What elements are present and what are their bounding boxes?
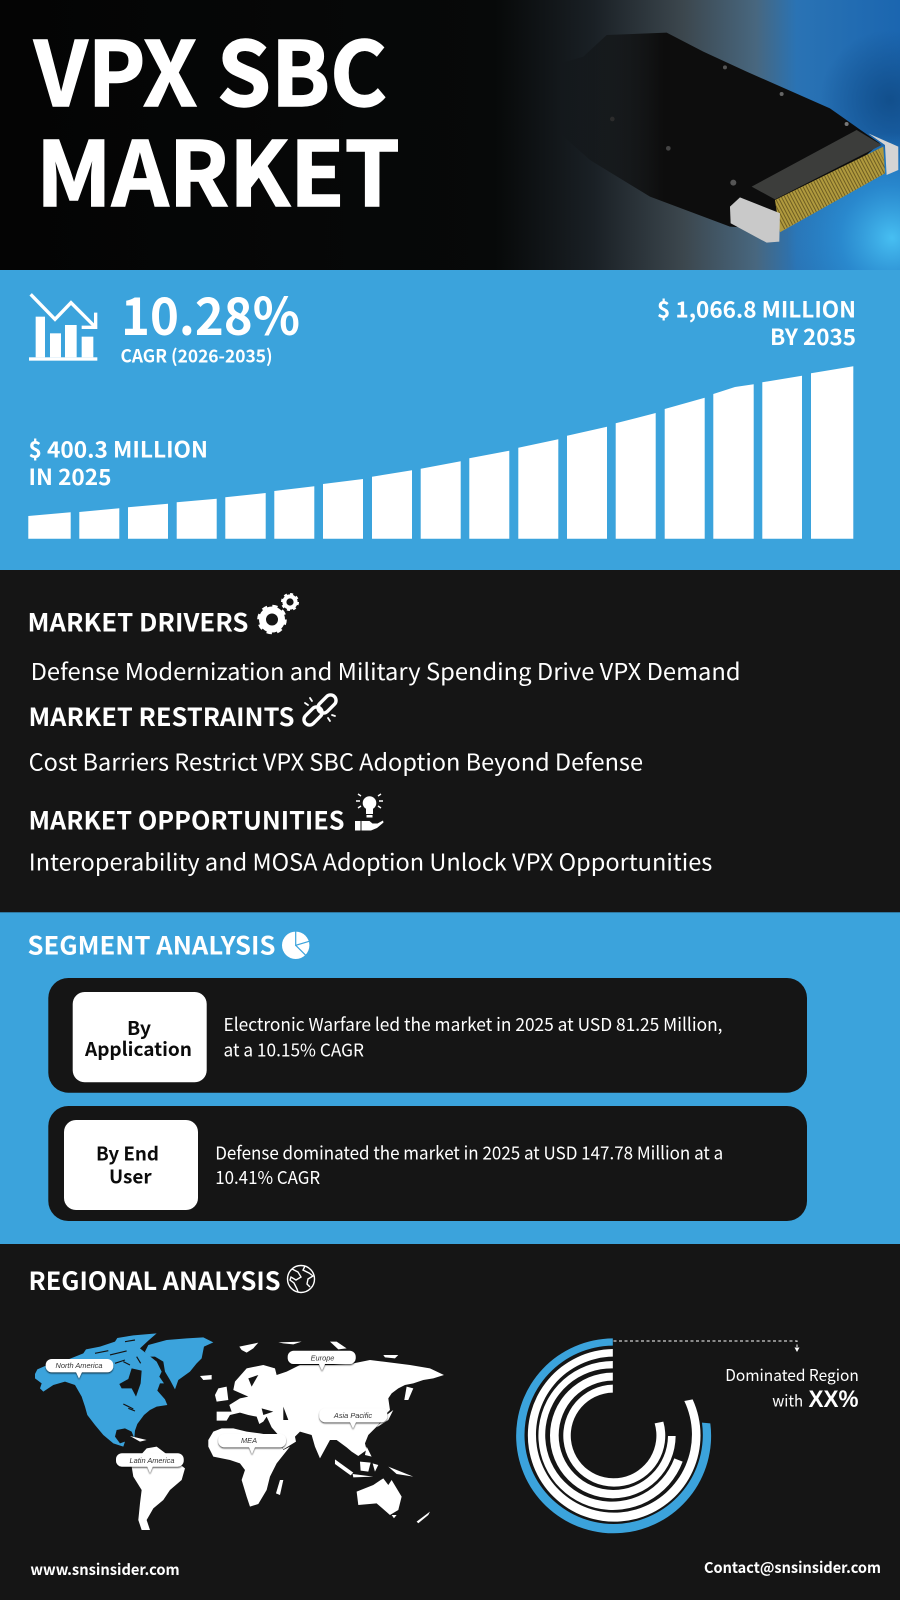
heading: regional analysis: REGIONAL ANALYSIS — [28, 1262, 280, 1298]
callout: Latin America: Latin America — [130, 1456, 174, 1465]
heading: market drivers: MARKET DRIVERS — [28, 604, 248, 640]
text: by end user — [215, 1139, 723, 1190]
label: by end user — [64, 1120, 198, 1210]
card: by application — [48, 978, 807, 1093]
heading: market restraints: MARKET RESTRAINTS — [28, 698, 294, 734]
opportunity text: Interoperability and MOSA Adoption Unlock VPX Opportunities — [29, 844, 712, 878]
dashed leader arrow — [614, 1341, 800, 1352]
2025 value — [28, 432, 208, 492]
icon: lightbulb in hand — [355, 794, 384, 830]
driver text: Defense Modernization and Military Spending Drive VPX Demand — [31, 653, 741, 687]
icon: chart with arrow — [29, 294, 97, 361]
text: by application: Electronic Warfare led the market in 2025 at USD 81.25 Million, — [224, 1011, 722, 1037]
CAGR label: CAGR (2026-2035) — [120, 342, 272, 368]
icon: gears — [259, 594, 298, 632]
text: by application: at a 10.15% CAGR — [224, 1036, 364, 1062]
other continents — [130, 1342, 444, 1530]
title — [33, 3, 400, 232]
2025 value: IN 2025 — [28, 460, 112, 492]
label: by application: Application — [84, 1035, 192, 1062]
callout: Latin America — [116, 1453, 184, 1473]
North America and Greenland — [35, 1333, 213, 1447]
icon: pie chart — [282, 931, 309, 959]
label: by application: By — [127, 1014, 151, 1041]
text: by application — [224, 1011, 722, 1062]
panel: header — [0, 0, 900, 270]
CAGR value: 10.28% — [121, 275, 300, 350]
callout: Asia Pacific — [319, 1408, 387, 1428]
icon: broken link — [302, 693, 338, 727]
callout: Europe — [288, 1351, 356, 1370]
2035 value — [657, 292, 856, 352]
panel: segment analysis — [0, 912, 900, 1244]
label: by application — [73, 992, 207, 1082]
callout: North America — [46, 1359, 113, 1378]
callout: MEA: MEA — [241, 1436, 257, 1445]
illustration: VPX single board computer — [560, 33, 898, 243]
title: MARKET — [36, 103, 400, 232]
restraint text: Cost Barriers Restrict VPX SBC Adoption Beyond Defense — [29, 744, 643, 778]
text: by end user: 10.41% CAGR — [215, 1164, 320, 1190]
label: by end user: By End — [96, 1140, 159, 1167]
dominated region text: Dominated Region — [725, 1362, 859, 1386]
dominated region text: with — [772, 1388, 803, 1412]
world map — [35, 1333, 444, 1530]
callout: Asia Pacific: Asia Pacific — [333, 1411, 372, 1420]
title: VPX SBC — [33, 3, 387, 132]
panel: market dynamics — [0, 570, 900, 912]
callout: North America: North America — [56, 1361, 102, 1370]
card: by end user — [48, 1106, 807, 1221]
footer: website: www.snsinsider.com — [30, 1559, 180, 1580]
label: by end user: User — [109, 1162, 152, 1189]
heading: segment analysis: SEGMENT ANALYSIS — [28, 926, 276, 962]
heading: market opportunities: MARKET OPPORTUNITIES — [28, 801, 344, 837]
text: by end user: Defense dominated the market in 2025 at USD 147.78 Million at a — [215, 1139, 723, 1165]
icon: globe — [288, 1266, 314, 1292]
2035 value: BY 2035 — [770, 320, 856, 352]
panel: regional analysis — [0, 1244, 900, 1600]
2035 value: $ 1,066.8 MILLION — [657, 292, 856, 324]
inland seas — [248, 1375, 288, 1420]
bar chart — [28, 366, 853, 539]
dominated region text: XX% — [808, 1386, 858, 1413]
radial chart — [516, 1338, 711, 1533]
callout: MEA — [218, 1434, 286, 1454]
callout: Europe: Europe — [311, 1353, 334, 1362]
footer: contact: Contact@snsinsider.com — [704, 1557, 881, 1578]
panel: market growth — [0, 270, 900, 570]
2025 value: $ 400.3 MILLION — [28, 432, 208, 464]
dominated region text — [725, 1362, 859, 1413]
Hudson Bay and Arctic channels — [95, 1340, 142, 1411]
